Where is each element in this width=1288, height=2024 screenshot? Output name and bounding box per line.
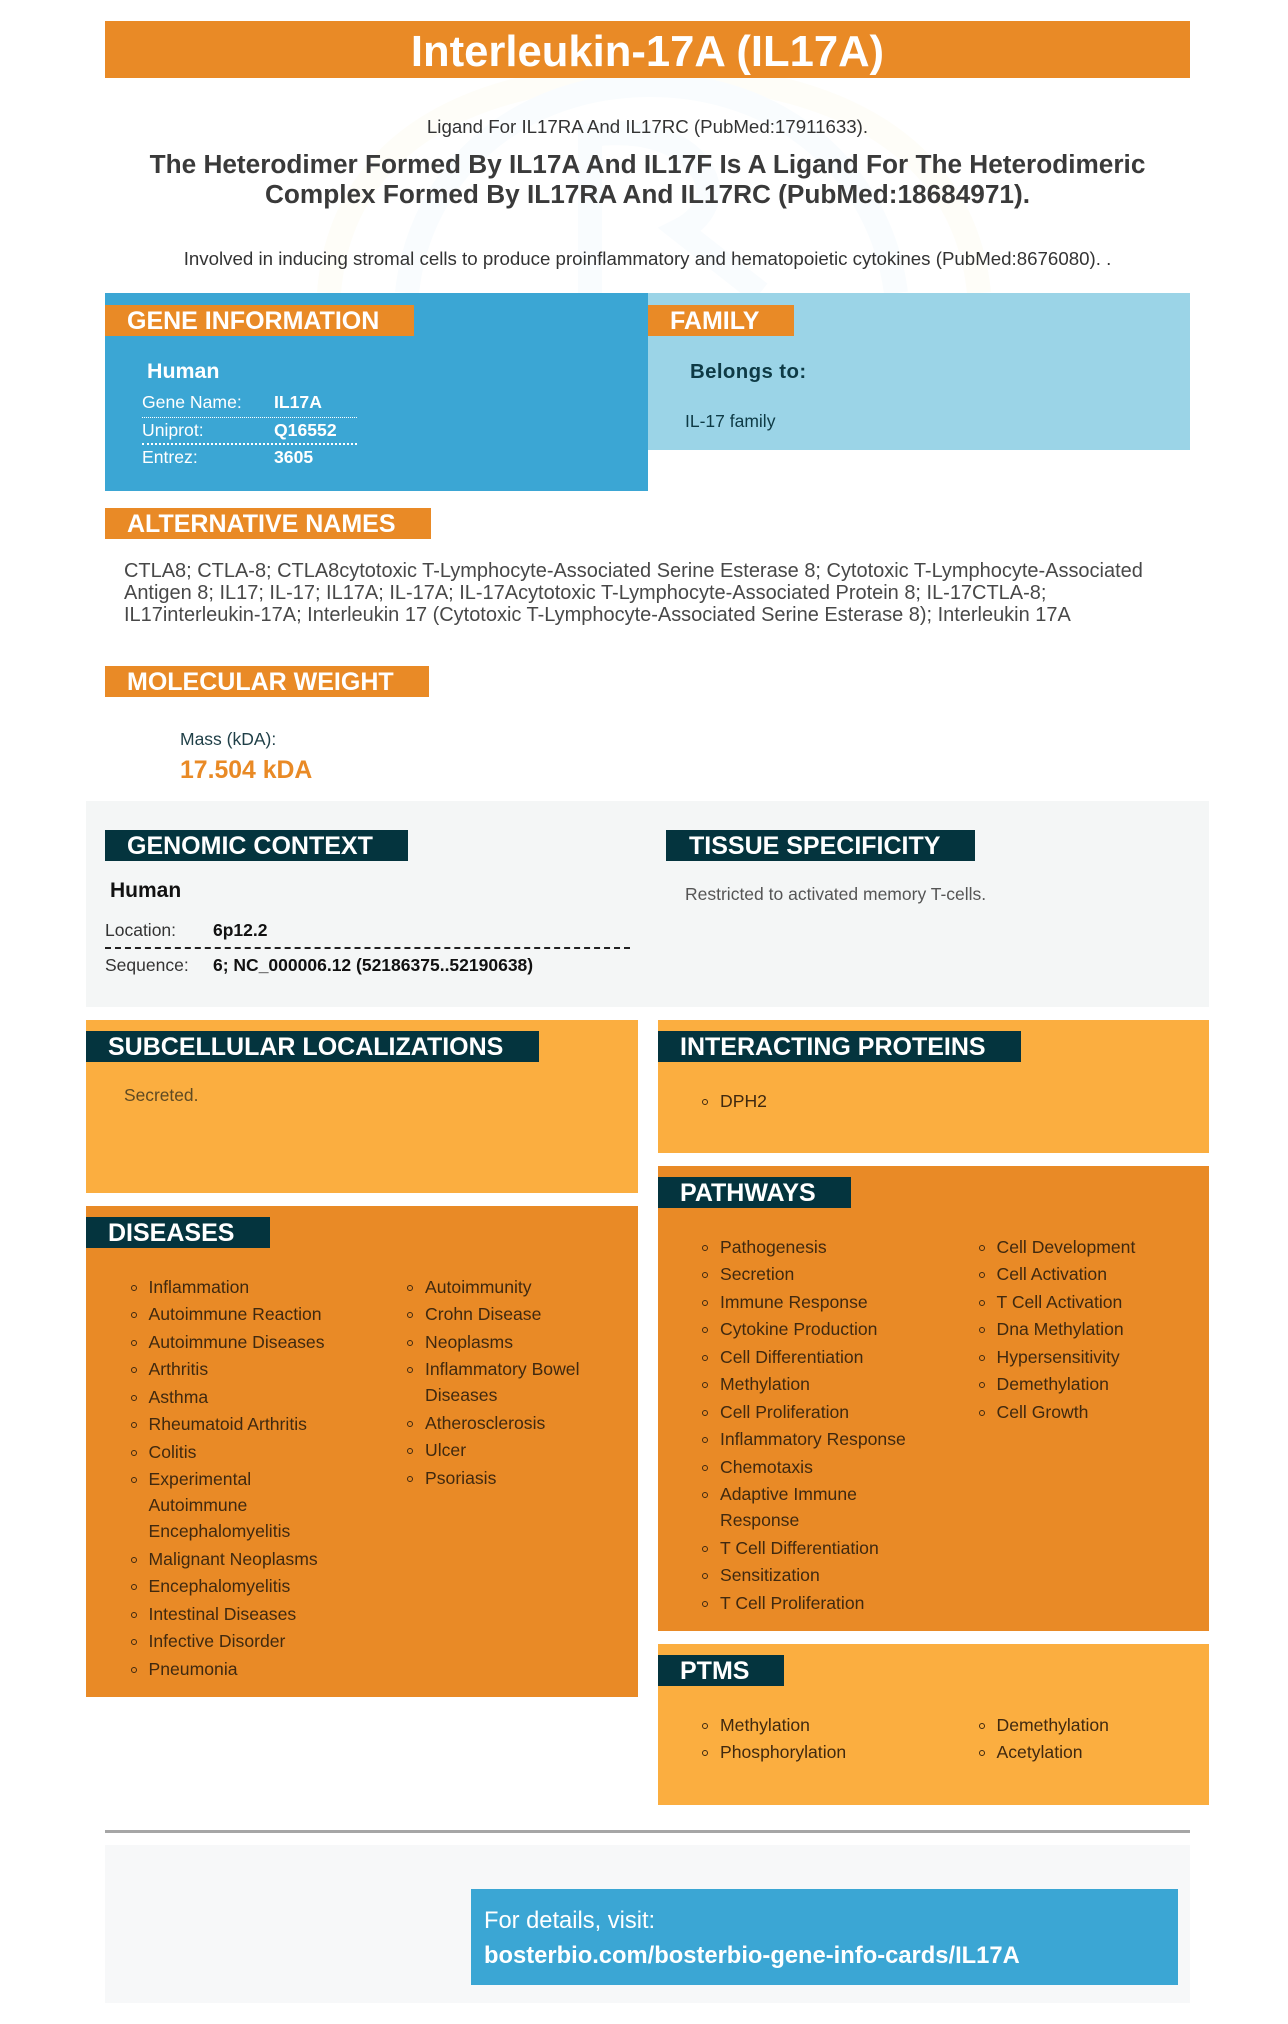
pathways list column 1: Methylation — [720, 1374, 810, 1394]
diseases list column 2: Autoimmunity — [425, 1276, 532, 1296]
diseases list column 1: Intestinal Diseases — [148, 1604, 296, 1624]
alternative names text: Antigen 8; IL17; IL-17; IL17A; IL-17A; IL-17Acytotoxic T-Lymphocyte-Associated Protein 8; IL-17CTLA-8; — [124, 582, 1046, 604]
pathways list column 1: Cell Proliferation — [720, 1402, 849, 1422]
diseases list column 1: Encephalomyelitis — [148, 1521, 290, 1541]
sequence row: 6; NC_000006.12 (52186375..52190638) — [213, 955, 533, 975]
callout url: bosterbio.com/bosterbio-gene-info-cards/IL17A — [484, 1942, 1020, 1969]
location row: Location: — [105, 920, 176, 940]
pathways list column 2: T Cell Activation — [996, 1292, 1122, 1312]
diseases list column 2 — [407, 1276, 580, 1488]
alternative names text: CTLA8; CTLA-8; CTLA8cytotoxic T-Lymphocyte-Associated Serine Esterase 8; Cytotoxic T-Lymphocyte-Associated — [124, 560, 1143, 582]
diseases list column 2: Neoplasms — [425, 1332, 513, 1352]
panel: ptms — [658, 1644, 1209, 1805]
pathways list column 2: Cell Growth — [996, 1402, 1088, 1422]
diseases list column 2: Crohn Disease — [425, 1304, 541, 1324]
heading: family — [648, 305, 794, 336]
panel: footer — [105, 1845, 1190, 2003]
pathways list column 1: Response — [720, 1510, 799, 1530]
pathways list column 1: Immune Response — [720, 1292, 868, 1312]
diseases list column 1: Experimental — [148, 1469, 251, 1489]
ptms list column 2: Acetylation — [996, 1742, 1083, 1762]
heading: genomic context: GENOMIC CONTEXT — [127, 832, 373, 860]
heading: subcellular localizations: SUBCELLULAR LOCALIZATIONS — [108, 1033, 503, 1061]
pathways list column 1 — [702, 1236, 906, 1612]
panel: diseases — [86, 1206, 638, 1697]
diseases list column 2: Ulcer — [425, 1440, 466, 1460]
mass value: 17.504 kDA — [180, 757, 312, 784]
diseases list column 1 — [131, 1276, 325, 1678]
diseases list column 1: Infective Disorder — [148, 1631, 285, 1651]
heading: diseases — [86, 1217, 270, 1248]
pathways list column 1: T Cell Proliferation — [720, 1592, 864, 1612]
pathways list column 2: Cell Development — [996, 1236, 1135, 1256]
heading: pathways: PATHWAYS — [680, 1179, 816, 1207]
heading: pathways — [658, 1177, 851, 1208]
diseases list column 1: Inflammation — [148, 1276, 249, 1296]
pathways list column 1: T Cell Differentiation — [720, 1538, 879, 1558]
function text: ligand: Ligand For IL17RA And IL17RC (PubMed:17911633). — [427, 116, 868, 137]
pathways list column 1: Adaptive Immune — [720, 1484, 857, 1504]
alternative names text — [124, 560, 1143, 626]
ptms list column 1 — [702, 1714, 846, 1762]
pathways list column 2: Hypersensitivity — [996, 1346, 1120, 1366]
pathways list column 1: Cell Differentiation — [720, 1346, 863, 1366]
ptms list column 2: Demethylation — [996, 1714, 1109, 1734]
callout: details link — [471, 1889, 1178, 1985]
belongs to label: Belongs to: — [690, 361, 807, 383]
pathways list column 2: Dna Methylation — [996, 1319, 1124, 1339]
heading: alternative names: ALTERNATIVE NAMES — [127, 510, 396, 538]
ptms list column 1: Methylation — [720, 1714, 810, 1734]
pathways list column 1: Pathogenesis — [720, 1236, 827, 1256]
tissue specificity text: Restricted to activated memory T-cells. — [685, 884, 986, 904]
title banner: Interleukin-17A (IL17A) — [411, 28, 884, 76]
mass label: Mass (kDA): — [180, 729, 276, 749]
location row — [105, 918, 630, 949]
background watermark logo — [0, 78, 1288, 293]
heading: gene information: GENE INFORMATION — [127, 307, 379, 335]
panel: subcellular localizations — [86, 1020, 638, 1193]
diseases list column 2: Atherosclerosis — [425, 1412, 545, 1432]
diseases list column 1: Encephalomyelitis — [148, 1576, 290, 1596]
panel: interacting proteins — [658, 1020, 1209, 1153]
ptms list column 1: Phosphorylation — [720, 1742, 846, 1762]
heading: molecular weight: MOLECULAR WEIGHT — [127, 668, 394, 696]
family value: IL-17 family — [685, 411, 775, 431]
diseases list column 2: Inflammatory Bowel — [425, 1359, 580, 1379]
heading: diseases: DISEASES — [108, 1219, 234, 1247]
pathways list column 1: Inflammatory Response — [720, 1429, 906, 1449]
pathways list column 1: Cytokine Production — [720, 1319, 877, 1339]
panel: gene information — [105, 293, 648, 491]
pathways list column 1: Chemotaxis — [720, 1456, 813, 1476]
diseases list column 1: Autoimmune Reaction — [148, 1304, 322, 1324]
diseases list column 1: Rheumatoid Arthritis — [148, 1414, 307, 1434]
uniprot row — [142, 418, 357, 445]
ptms list column 2 — [979, 1714, 1109, 1762]
pathways list column 2 — [979, 1236, 1136, 1422]
diseases list column 1: Autoimmune Diseases — [148, 1332, 325, 1352]
diseases list column 1: Colitis — [148, 1442, 196, 1462]
function heading — [150, 149, 1145, 208]
gene name row — [142, 390, 357, 418]
species label: Human — [147, 359, 220, 383]
localization text: Secreted. — [124, 1085, 198, 1105]
function text: cytokines: Involved in inducing stromal cells to produce proinflammatory and hematopoietic cytokines (PubMed:8676080). . — [184, 248, 1111, 269]
entrez row: Entrez: — [142, 447, 198, 467]
gene name row: Gene Name: — [142, 392, 242, 412]
diseases list column 1: Arthritis — [148, 1359, 208, 1379]
panel: family — [648, 293, 1190, 450]
uniprot row: Uniprot: — [142, 420, 204, 440]
sequence row: Sequence: — [105, 955, 189, 975]
entrez row — [142, 447, 313, 467]
diseases list column 2: Diseases — [425, 1385, 497, 1405]
pathways list column 1: Secretion — [720, 1264, 794, 1284]
callout label: For details, visit: — [484, 1908, 655, 1934]
heading: tissue specificity: TISSUE SPECIFICITY — [689, 832, 940, 860]
diseases list column 2: Psoriasis — [425, 1468, 496, 1488]
heading: family: FAMILY — [670, 307, 759, 335]
title banner — [105, 21, 1190, 78]
pathways list column 2: Cell Activation — [996, 1264, 1107, 1284]
diseases list column 1: Asthma — [148, 1386, 208, 1406]
function heading: The Heterodimer Formed By IL17A And IL17F Is A Ligand For The Heterodimeric — [150, 149, 1145, 179]
location row: 6p12.2 — [213, 920, 267, 940]
pathways list column 1: Sensitization — [720, 1565, 820, 1585]
uniprot row: Q16552 — [274, 420, 337, 440]
gene name row: IL17A — [274, 392, 322, 412]
heading: ptms — [658, 1655, 784, 1686]
diseases list column 1: Pneumonia — [148, 1658, 238, 1678]
interacting proteins list: DPH2 — [720, 1091, 767, 1111]
alternative names text: IL17interleukin-17A; Interleukin 17 (Cytotoxic T-Lymphocyte-Associated Serine Esterase 8); Interleukin 17A — [124, 604, 1071, 626]
species label: Human — [110, 879, 181, 902]
diseases list column 1: Autoimmune — [148, 1495, 247, 1515]
heading: interacting proteins: INTERACTING PROTEINS — [680, 1033, 986, 1061]
function heading: Complex Formed By IL17RA And IL17RC (PubMed:18684971). — [265, 178, 1030, 208]
panel: genomic context and tissue specificity — [86, 801, 1209, 1007]
panel: pathways — [658, 1166, 1209, 1631]
pathways list column 2: Demethylation — [996, 1374, 1109, 1394]
entrez row: 3605 — [274, 447, 313, 467]
heading: ptms: PTMS — [680, 1657, 749, 1685]
diseases list column 1: Malignant Neoplasms — [148, 1548, 318, 1568]
